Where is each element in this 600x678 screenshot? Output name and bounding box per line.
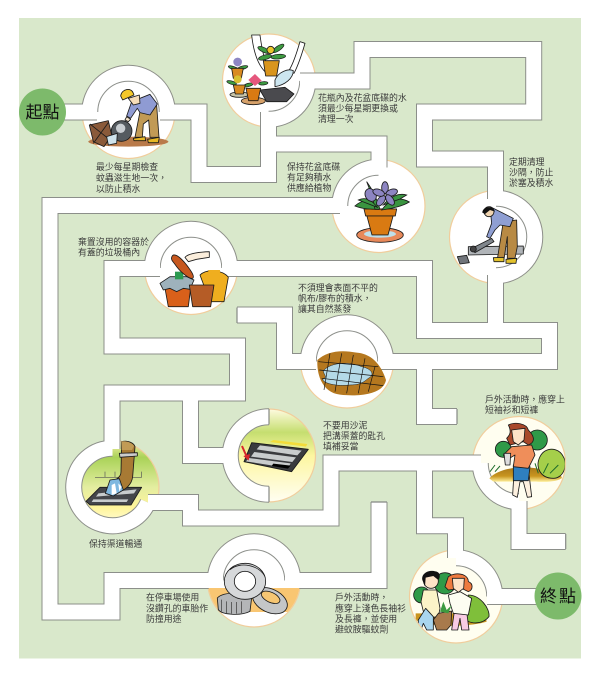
illustration: man clearing a drain [457, 207, 523, 264]
illustration: puddle on uneven tarpaulin [317, 351, 386, 395]
maze corridor fill [42, 50, 566, 612]
caption: long sleeves and repellent: 避蚊胺驅蚊劑 [335, 624, 388, 634]
illustration: rubbish bins with lid [160, 252, 228, 307]
caption: inspect breeding places: 以防止積水 [96, 183, 140, 194]
illustration: flower pots and saucers [226, 35, 305, 105]
illustration: worker checking tyres and crates [88, 89, 168, 147]
start marker [19, 88, 66, 136]
illustration: flower in pot on saucer [355, 182, 409, 242]
caption: change vase water: 清理一次 [318, 113, 354, 124]
caption: drain cover holes: 把溝渠蓋的匙孔 [323, 430, 385, 441]
caption: clear sand traps: 沙隔，防止 [509, 166, 553, 178]
caption: tyres in car park: 沒鑽孔的車胎作 [146, 602, 208, 614]
caption: tarpaulin water: 讓其自然蒸發 [298, 303, 351, 314]
caption: saucer water: 供應給植物 [287, 182, 331, 193]
end marker: 終點 [540, 587, 576, 606]
caption: keep drains clear: 保持渠道暢通 [89, 538, 142, 549]
caption: inspect breeding places: 蚊蟲滋生地一次， [96, 172, 167, 183]
maze corridor outlines [42, 50, 566, 612]
caption: tarpaulin water: 帆布/膠布的積水， [298, 292, 371, 304]
caption: discard containers: 有蓋的垃圾桶內 [78, 246, 140, 258]
caption: long sleeves and repellent: 應穿上淺色長袖衫 [335, 602, 406, 614]
caption: clear sand traps: 定期清理 [509, 156, 545, 167]
caption: long sleeves and repellent: 及長褲，並使用 [335, 613, 397, 624]
caption: inspect breeding places: 最少每星期檢查 [96, 161, 158, 172]
caption: short sleeves outdoors: 戶外活動時，應穿上 [485, 394, 565, 404]
caption: drain cover holes: 填補妥當 [323, 440, 359, 452]
illustration: stacked old tyres [208, 563, 300, 619]
caption: change vase water: 須最少每星期更換或 [318, 102, 398, 114]
illustration: drain cover with red arrow [242, 440, 308, 472]
caption: clear sand traps: 淤塞及積水 [509, 177, 553, 188]
caption: saucer water: 保持花盆底碟 [287, 161, 340, 172]
illustration: drainpipe draining onto grate [86, 441, 142, 505]
caption: short sleeves outdoors: 短袖衫和短褲 [485, 404, 538, 415]
caption: long sleeves and repellent: 戶外活動時， [335, 592, 388, 602]
start marker: 起點 [26, 103, 60, 122]
caption: saucer water: 有足夠積水 [287, 172, 331, 182]
illustration: woman in short sleeves and shorts [489, 423, 565, 497]
caption: drain cover holes: 不要用沙泥 [323, 420, 367, 430]
caption: tarpaulin water: 不須理會表面不平的 [298, 282, 378, 293]
illustration discs [66, 34, 566, 643]
caption: discard containers: 棄置沒用的容器於 [78, 236, 149, 247]
caption: change vase water: 花瓶內及花盆底碟的水 [318, 92, 407, 103]
caption: tyres in car park: 防撞用途 [146, 613, 182, 624]
end marker [534, 572, 582, 620]
caption: tyres in car park: 在停車場使用 [146, 592, 199, 602]
illustration: couple in long sleeves [414, 571, 489, 630]
